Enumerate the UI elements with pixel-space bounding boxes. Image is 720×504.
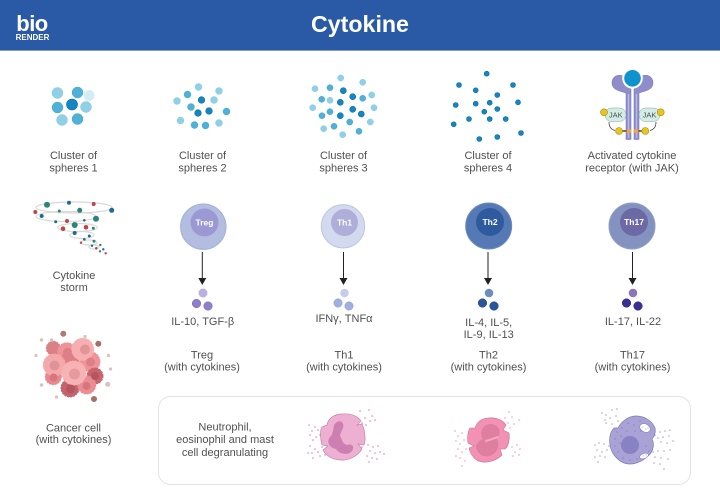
label: cluster 4: spheres 4	[464, 162, 512, 174]
label: activated receptor: Activated cytokine	[588, 150, 676, 162]
label: activated receptor: receptor (with JAK)	[585, 162, 679, 174]
icon: activated cytokine receptor with JAK	[600, 68, 664, 140]
cell: Th1	[321, 205, 365, 248]
panel: degranulating cells	[158, 396, 690, 484]
cell: Th17: Th17	[624, 217, 644, 227]
label: cytokine storm: storm	[60, 282, 88, 294]
panel text: Neutrophil,	[198, 422, 252, 434]
label: cluster 1: spheres 1	[49, 162, 98, 174]
cell: Th17	[609, 203, 655, 249]
label: Treg cytokines: IL-10, TGF-β	[171, 316, 234, 328]
icon: neutrophil degranulating	[308, 410, 384, 462]
cytokines: Treg	[192, 288, 212, 310]
icon: cancer cell with cytokines	[34, 331, 112, 402]
icon: cluster of spheres 2	[174, 84, 230, 129]
label: Th1 with cytokines: Th1	[335, 350, 353, 362]
arrow: Th1 to cytokines	[340, 252, 348, 285]
icon: eosinophil degranulating	[455, 412, 520, 466]
label: Th17 cytokines: IL-17, IL-22	[605, 316, 661, 328]
cell: Th2	[466, 203, 512, 249]
icon: mast cell degranulating	[595, 409, 673, 469]
label: Th1 with cytokines: (with cytokines)	[306, 362, 382, 374]
cell: Th1: Th1	[337, 218, 352, 228]
icon: cytokine storm	[33, 201, 114, 254]
cytokines: Th1	[334, 289, 353, 310]
arrow: Th17 to cytokines	[628, 252, 636, 285]
label: cluster 1: Cluster of	[50, 150, 98, 162]
icon: cluster of spheres 1	[52, 87, 94, 126]
label: Treg with cytokines: Treg	[191, 350, 213, 362]
logo: BioRender: bio	[16, 11, 48, 36]
icon: activated cytokine receptor with JAK: JAK	[609, 110, 623, 120]
icon: cluster of spheres 3	[310, 75, 377, 138]
label: cluster 2: spheres 2	[178, 162, 227, 174]
cell: Th2: Th2	[482, 217, 498, 227]
label: Th1 cytokines: IFNγ, TNFα	[315, 313, 373, 325]
icon: activated cytokine receptor with JAK: JAK	[643, 110, 656, 120]
label: cytokine storm: Cytokine	[53, 270, 95, 282]
label: Th2 with cytokines: Th2	[479, 350, 498, 362]
label: Th17 with cytokines: (with cytokines)	[595, 362, 670, 374]
label: Th17 with cytokines: Th17	[620, 350, 645, 362]
label: cluster 3: Cluster of	[320, 150, 368, 162]
title: Cytokine	[311, 11, 409, 37]
cytokines: Th2	[478, 289, 498, 310]
label: cluster 4: Cluster of	[464, 150, 512, 162]
label: Th2 cytokines: IL-4, IL-5,	[465, 317, 512, 329]
header banner	[0, 0, 720, 51]
icon: cluster of spheres 4	[451, 71, 524, 142]
label: Th2 with cytokines: (with cytokines)	[451, 362, 526, 374]
label: cancer cell: Cancer cell	[46, 422, 101, 434]
cell: Treg	[181, 204, 226, 249]
logo: BioRender: RENDER	[16, 33, 50, 42]
label: cancer cell: (with cytokines)	[36, 434, 111, 446]
label: Th2 cytokines: IL-9, IL-13	[464, 329, 514, 341]
cytokines: Th17	[622, 289, 642, 310]
arrow: Th2 to cytokines	[484, 252, 492, 285]
label: cluster 2: Cluster of	[179, 150, 227, 162]
label: cluster 3: spheres 3	[319, 162, 368, 174]
label: Treg with cytokines: (with cytokines)	[164, 362, 240, 374]
cell: Treg: Treg	[196, 218, 213, 228]
panel text: cell degranulating	[182, 447, 268, 459]
arrow: Treg to cytokines	[198, 252, 206, 285]
panel text: eosinophil and mast	[176, 434, 274, 446]
